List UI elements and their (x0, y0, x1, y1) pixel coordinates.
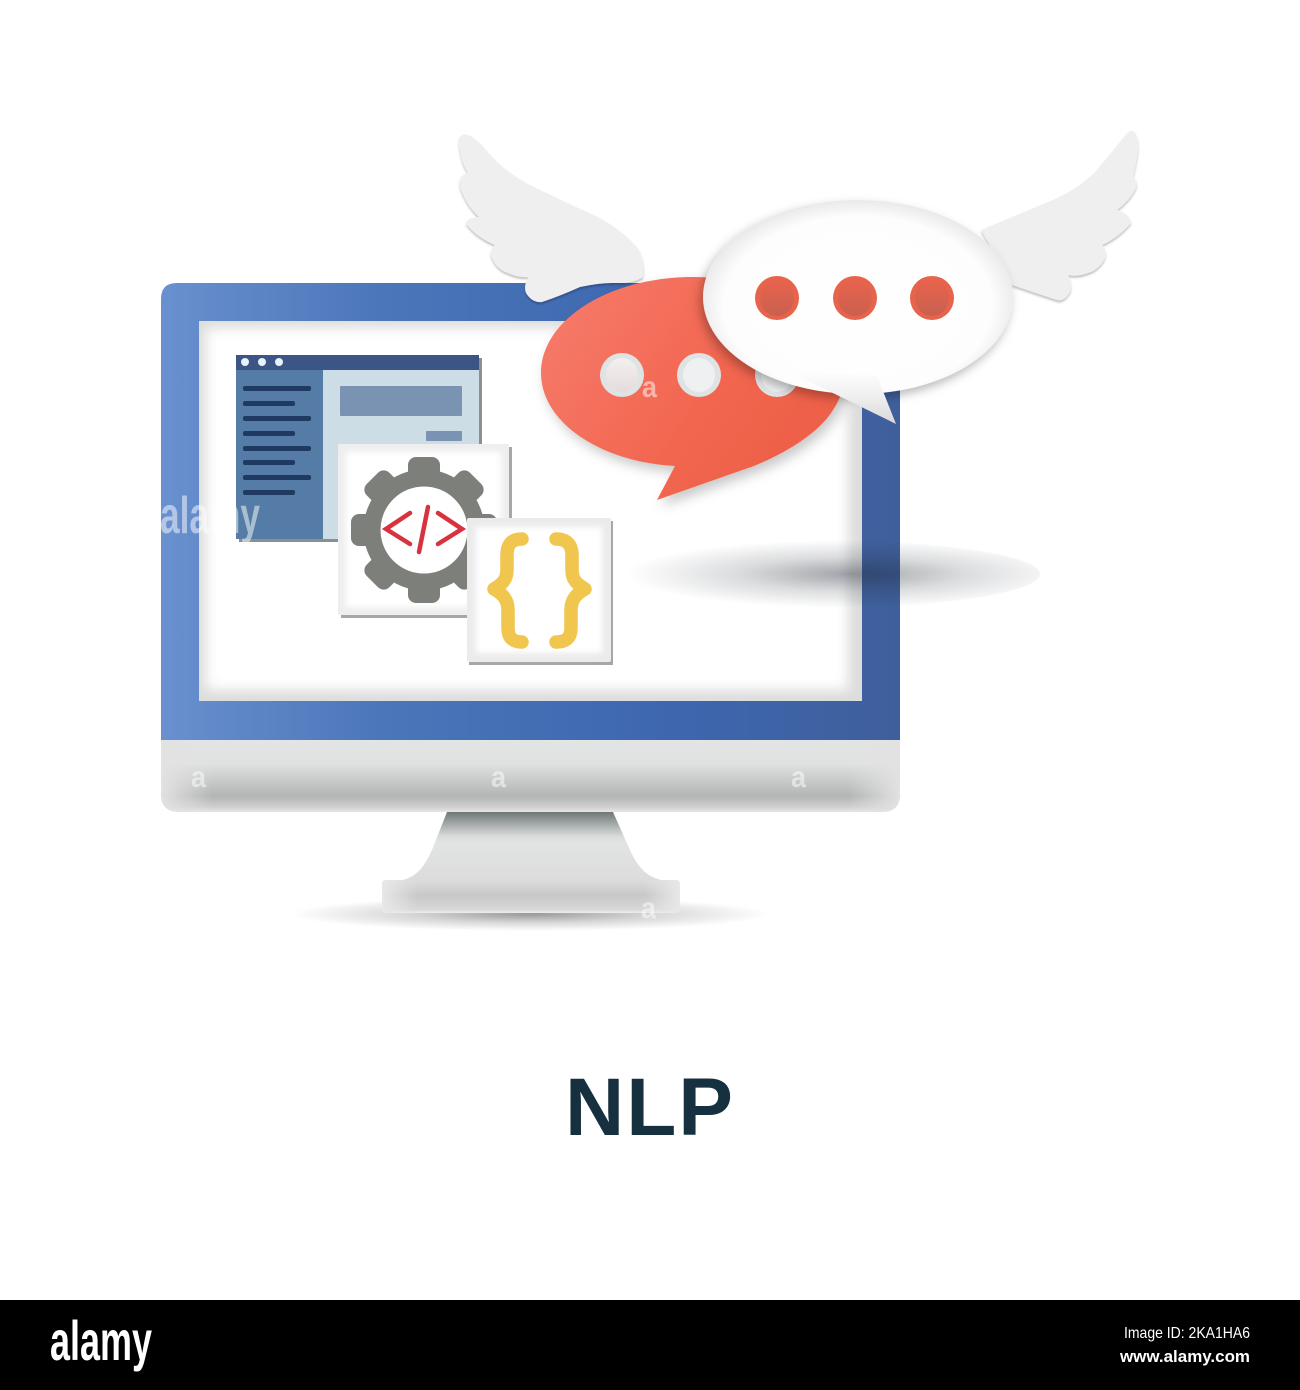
white speech bubble (703, 200, 1013, 424)
white bubble tail (790, 372, 896, 424)
monitor stand neck (392, 812, 672, 881)
watermark marks: a (642, 371, 657, 404)
floating shadow on screen (590, 540, 1040, 608)
sidebar text lines (243, 386, 311, 495)
gear icon (351, 457, 497, 603)
gear code card (338, 444, 512, 618)
code symbol (386, 507, 462, 552)
website: www.alamy.com (1119, 1347, 1250, 1366)
watermark marks: a (641, 892, 656, 925)
watermark marks: a (491, 761, 506, 794)
monitor screen (199, 321, 862, 701)
window title bar (236, 355, 479, 370)
card shadow (469, 521, 613, 665)
curly braces icon (494, 539, 585, 642)
footer bar (0, 1300, 1300, 1390)
footer logo: alamy (50, 1309, 152, 1372)
white bubble dots (755, 276, 954, 320)
title: NLP (565, 1062, 735, 1153)
window content panel (323, 370, 479, 539)
watermark marks (160, 371, 806, 925)
curly braces card (467, 518, 613, 665)
card (338, 444, 509, 615)
red bubble dots (600, 353, 799, 397)
stand shadow (290, 897, 770, 931)
content blocks (340, 386, 462, 441)
image id: Image ID: 2KA1HA6 (1124, 1325, 1250, 1342)
application window (236, 355, 482, 542)
monitor chin (161, 740, 900, 812)
window control dots (241, 358, 283, 366)
card (467, 518, 611, 662)
red speech bubble (541, 277, 845, 500)
watermark marks: alamy (160, 487, 260, 545)
watermark marks: a (791, 761, 806, 794)
left wing (459, 134, 644, 302)
window shadow (239, 358, 482, 542)
watermark marks: a (191, 761, 206, 794)
monitor blue frame (161, 283, 900, 740)
right wing (981, 131, 1138, 300)
card shadow (341, 447, 512, 618)
white bubble body (703, 200, 1013, 394)
monitor (161, 283, 1040, 931)
red bubble body (541, 277, 845, 500)
monitor stand base (382, 880, 680, 913)
window sidebar (236, 370, 323, 539)
